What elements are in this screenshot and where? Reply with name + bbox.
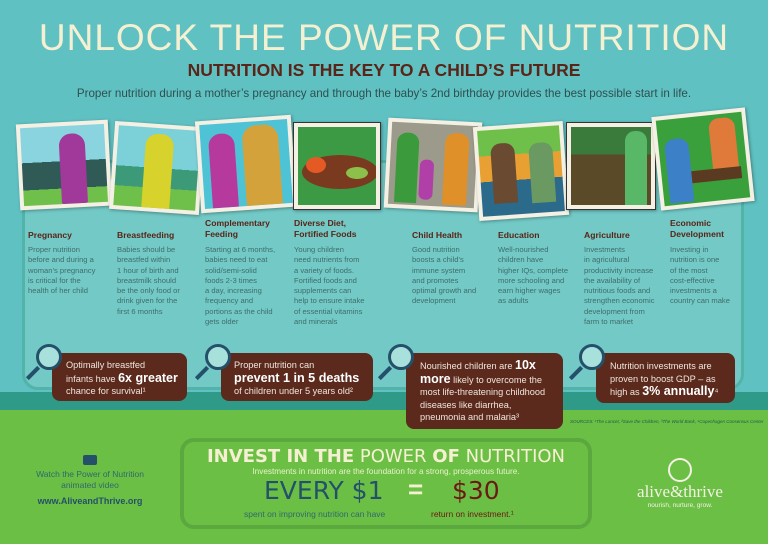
column: pregnancy: health of her child bbox=[28, 286, 88, 295]
column: complementary feeding: a day, increasing bbox=[205, 286, 262, 295]
column: breastfeeding: drink given for the bbox=[117, 296, 177, 305]
column: complementary feeding: Starting at 6 months, bbox=[205, 245, 275, 254]
logo: alive & thrive bbox=[637, 458, 723, 509]
icon: logo swirl bbox=[668, 458, 692, 482]
column: education: as adults bbox=[498, 296, 528, 305]
column: child health: Good nutrition bbox=[412, 245, 460, 254]
icon: magnifier 2 bbox=[205, 344, 231, 370]
column: education: earn higher wages bbox=[498, 286, 560, 295]
column: breastfeeding: breastfed within bbox=[117, 255, 170, 264]
column: pregnancy: woman’s pregnancy bbox=[28, 266, 95, 275]
column: education: Well-nourished bbox=[498, 245, 549, 254]
column: diverse diet: Diverse Diet, bbox=[294, 218, 346, 228]
every $1: EVERY $1 bbox=[264, 476, 384, 505]
green footer background bbox=[0, 410, 768, 544]
icon: magnifier 4 bbox=[579, 344, 605, 370]
callout: GDP: high as 3% annually⁴ bbox=[610, 384, 718, 398]
callout: nourished children: diseases like diarrhea, bbox=[420, 400, 511, 410]
callout: breastfed survival: chance for survival¹ bbox=[66, 386, 146, 396]
column: education: more schooling and bbox=[498, 276, 564, 285]
column: agriculture: the availability of bbox=[584, 276, 640, 285]
photo: breastfeeding bbox=[109, 121, 205, 215]
logo: alive & thrive: nourish, nurture, grow. bbox=[648, 502, 712, 509]
column: education: Education bbox=[498, 230, 540, 240]
column: child health bbox=[412, 230, 476, 305]
column: agriculture: strengthen economic bbox=[584, 296, 654, 305]
column: pregnancy bbox=[28, 230, 96, 295]
callout: prevent deaths bbox=[221, 353, 373, 401]
callout: GDP bbox=[596, 353, 735, 403]
callout: nourished children: more likely to overcome the bbox=[420, 372, 542, 386]
column: education: children have bbox=[498, 255, 543, 264]
every $1 caption: spent on improving nutrition can have bbox=[244, 509, 385, 519]
column: complementary feeding: gets older bbox=[205, 317, 238, 326]
column: economic development: investments a bbox=[670, 286, 717, 295]
column: economic development: Investing in bbox=[670, 245, 708, 254]
photo: child health bbox=[384, 118, 482, 212]
content panel background bbox=[22, 160, 744, 390]
column: diverse diet: help to ensure intake bbox=[294, 296, 365, 305]
column: diverse diet: a variety of foods. bbox=[294, 266, 354, 275]
column: diverse diet: need nutrients from bbox=[294, 255, 359, 264]
column: breastfeeding: be the only food or bbox=[117, 286, 180, 295]
invest subtext: Investments in nutrition are the foundation for a strong, prosperous future. bbox=[252, 467, 520, 476]
column: pregnancy: before and during a bbox=[28, 255, 94, 264]
$30: $30 bbox=[452, 476, 500, 505]
column: complementary feeding: portions as the child bbox=[205, 307, 273, 316]
column: agriculture: Investments bbox=[584, 245, 625, 254]
column: breastfeeding: first 6 months bbox=[117, 307, 163, 316]
callout: breastfed survival: infants have 6x greater bbox=[66, 370, 178, 384]
column: complementary feeding: babies need to eat bbox=[205, 255, 268, 264]
photo: education bbox=[473, 121, 569, 221]
callout: GDP: Nutrition investments are bbox=[610, 361, 712, 371]
column: economic development bbox=[670, 218, 730, 305]
photo: agriculture bbox=[566, 122, 656, 210]
column: agriculture: farm to market bbox=[584, 317, 633, 326]
column: economic development: country can make bbox=[670, 296, 730, 305]
column: diverse diet: of essential vitamins bbox=[294, 307, 362, 316]
column: diverse diet bbox=[294, 218, 365, 326]
column: economic development: Economic bbox=[670, 218, 711, 228]
subtitle: NUTRITION IS THE KEY TO A CHILD’S FUTURE bbox=[188, 60, 580, 80]
column: economic development: of the most bbox=[670, 266, 708, 275]
column: agriculture: Agriculture bbox=[584, 230, 630, 240]
column: complementary feeding: solid/semi-solid bbox=[205, 266, 257, 275]
callout: prevent deaths: Proper nutrition can bbox=[234, 360, 314, 370]
column: breastfeeding: breastmilk should bbox=[117, 276, 176, 285]
icon: video camera bbox=[83, 455, 97, 465]
bottom stripe bbox=[0, 392, 768, 414]
callout: breastfed survival bbox=[52, 353, 187, 401]
column: education bbox=[498, 230, 568, 305]
photo: pregnancy bbox=[16, 120, 112, 210]
column: breastfeeding: Babies should be bbox=[117, 245, 175, 254]
column: agriculture: nutritious foods and bbox=[584, 286, 650, 295]
column: child health: optimal growth and bbox=[412, 286, 476, 295]
column: child health: and promotes bbox=[412, 276, 458, 285]
equals: = bbox=[408, 474, 423, 504]
column: agriculture: productivity increase bbox=[584, 266, 653, 275]
callout: nourished children: most life-threatening childhood bbox=[420, 387, 545, 397]
column: diverse diet: Young children bbox=[294, 245, 344, 254]
column: complementary feeding: frequency and bbox=[205, 296, 253, 305]
column: breastfeeding: Breastfeeding bbox=[117, 230, 174, 240]
invest box bbox=[180, 438, 592, 529]
column: diverse diet: and minerals bbox=[294, 317, 337, 326]
column: complementary feeding: Complementary bbox=[205, 218, 270, 228]
column: pregnancy: is critical for the bbox=[28, 276, 81, 285]
column: agriculture: in agricultural bbox=[584, 255, 629, 264]
photo: complementary feeding bbox=[195, 115, 297, 213]
column: child health: development bbox=[412, 296, 455, 305]
sources: SOURCES: ¹The Lancet, ²Save the Children, ³The World Bank, ⁴Copenhagen Consensus Center bbox=[570, 419, 764, 424]
icon: magnifier 1 bbox=[36, 344, 62, 370]
callout: prevent deaths: of children under 5 years old² bbox=[234, 386, 353, 396]
column: pregnancy: Proper nutrition bbox=[28, 245, 80, 254]
title: UNLOCK THE POWER OF NUTRITION bbox=[39, 17, 729, 58]
column: complementary feeding: Feeding bbox=[205, 229, 238, 239]
$30 caption: return on investment.¹ bbox=[431, 509, 514, 519]
callout: prevent deaths: prevent 1 in 5 deaths bbox=[234, 370, 359, 384]
video link block: animated video bbox=[61, 480, 119, 490]
column: complementary feeding: foods 2-3 times bbox=[205, 276, 257, 285]
column: economic development: Development bbox=[670, 229, 724, 239]
column: breastfeeding bbox=[117, 230, 180, 316]
column: pregnancy: Pregnancy bbox=[28, 230, 72, 240]
column: economic development: cost-effective bbox=[670, 276, 715, 285]
column: education: higher IQs, complete bbox=[498, 266, 568, 275]
video link block: www.AliveandThrive.org bbox=[38, 496, 142, 506]
photo: diverse diet bbox=[293, 122, 381, 210]
column: agriculture bbox=[584, 230, 654, 326]
column: diverse diet: supplements can bbox=[294, 286, 351, 295]
intro text: Proper nutrition during a mother’s pregnancy and through the baby’s 2nd birthday provides the best possible start in life. bbox=[77, 87, 691, 100]
invest heading: INVEST IN THE POWER OF NUTRITION bbox=[207, 446, 565, 467]
column: breastfeeding: 1 hour of birth and bbox=[117, 266, 179, 275]
column: child health: boosts a child’s bbox=[412, 255, 464, 264]
column: economic development: nutrition is one bbox=[670, 255, 719, 264]
icon: magnifier 3 bbox=[388, 344, 414, 370]
column: child health: immune system bbox=[412, 266, 465, 275]
video link block: Watch the Power of Nutrition bbox=[36, 469, 144, 479]
column: diverse diet: Fortified Foods bbox=[294, 229, 357, 239]
callout: nourished children bbox=[406, 353, 563, 429]
callout: breastfed survival: Optimally breastfed bbox=[66, 360, 145, 370]
column: complementary feeding bbox=[205, 218, 275, 326]
callout: nourished children: pneumonia and malaria³ bbox=[420, 412, 519, 422]
column: agriculture: development from bbox=[584, 307, 645, 316]
callout: nourished children: Nourished children are 10x bbox=[420, 358, 536, 372]
photo: economic development bbox=[651, 107, 755, 211]
callout: GDP: proven to boost GDP – as bbox=[610, 374, 716, 384]
column: diverse diet: Fortified foods and bbox=[294, 276, 357, 285]
video link block bbox=[36, 455, 144, 506]
logo: alive & thrive: alive&thrive bbox=[637, 482, 723, 501]
column: child health: Child Health bbox=[412, 230, 462, 240]
